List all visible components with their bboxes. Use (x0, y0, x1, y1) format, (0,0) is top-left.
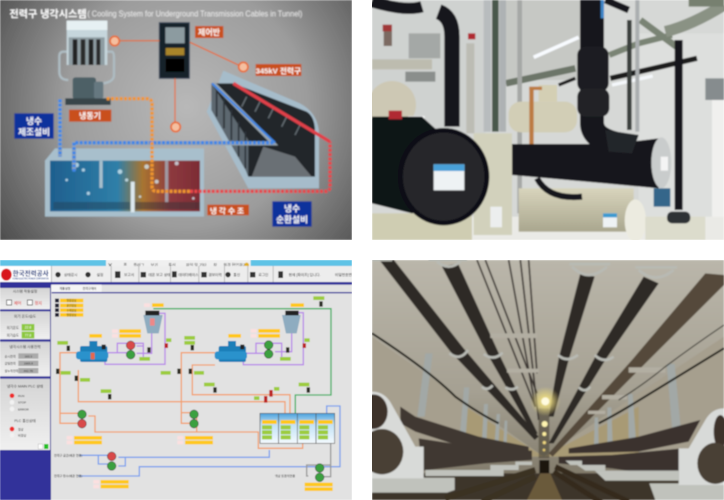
left valves and piping (368, 25, 475, 133)
legend (55, 299, 83, 317)
label: control panel (195, 26, 223, 38)
pipe endpoint labels: 맥상 트렌치연결 (275, 473, 295, 478)
legend: 수위정보 (67, 308, 77, 312)
sidebar: power use: 월누적전력 (5, 368, 19, 373)
cooling towers (143, 311, 301, 333)
title bar: 보기 (151, 262, 158, 268)
sidebar: system operation: 정지 (35, 300, 42, 306)
sidebar: PLC status: PLC 통신상태 (14, 418, 36, 423)
toolbar: 보고서 (124, 272, 134, 277)
tunnel lights (530, 387, 561, 451)
control panel (159, 23, 189, 78)
toolbar: 데몬 보고 상태 (148, 272, 171, 277)
icon: condenser unit (59, 21, 114, 83)
piping network (60, 309, 340, 477)
pink indicator tags (67, 303, 257, 488)
label: chilled water production equipment: 제조설비 (18, 126, 50, 137)
pipe endpoint labels: 전력구 공급(배관 연결) (54, 452, 82, 457)
toolbar: 로그인 (258, 272, 268, 277)
toolbar: 비밀번호변경 (335, 272, 355, 277)
green sensor readouts (57, 296, 324, 400)
label: chilled water circulation equipment: 냉수 (284, 202, 300, 213)
heading: cooling system title: ( Cooling System for Underground Transmission Cables in Tunnel) (87, 10, 303, 19)
panel: monitoring software screen (0, 260, 355, 500)
toolbar: 설정 (97, 272, 103, 277)
sidebar: outdoor temperature and humidity (0, 311, 50, 339)
piping: chilled supply, warm and return water (60, 83, 330, 191)
corrugated cables left (400, 407, 535, 500)
label: chiller (69, 110, 111, 122)
cooling water tank (45, 148, 204, 217)
side power cables (372, 325, 724, 423)
sidebar: PLC status: 정상 (18, 426, 24, 431)
sidebar: power use: 순시전력 (5, 353, 16, 358)
sidebar: power use: 163.3 (25, 354, 32, 358)
label: chiller: 냉동기 (79, 111, 101, 121)
corrugated cables right (554, 420, 700, 500)
tunnel (207, 71, 319, 188)
sidebar: power use: 금일전력 (5, 361, 16, 366)
panel: cooling system diagram (0, 0, 352, 240)
pumps (78, 341, 324, 482)
overhead pipes (379, 260, 724, 458)
sidebar: PLC status: RUN (18, 394, 24, 398)
sidebar: outdoor temperature and humidity: 외기온도 (7, 325, 19, 330)
water tanks (260, 413, 335, 443)
label: control panel: 제어반 (198, 27, 221, 37)
sensors (56, 301, 323, 403)
heading: cooling system title: 전력구 냉각시스템 (9, 7, 87, 20)
yellow status labels (74, 303, 333, 491)
control connection lines and nodes (110, 36, 248, 132)
ceiling cross beams (490, 333, 665, 414)
cable racks left (372, 462, 532, 493)
toolbar: 통신 (233, 272, 240, 277)
sidebar: PLC status: 냉각수 MAIN PLC 상태 (7, 383, 43, 388)
black evaporator shell and vertical pipe (512, 0, 671, 188)
wall brackets (417, 353, 681, 445)
dark upper pipes (372, 0, 679, 210)
panel: cable tunnel photo (360, 260, 724, 500)
KEPCO logo: KOREA ELECTRIC POWER CORPORATION (13, 277, 49, 280)
sidebar: power use: 442.7B (24, 369, 33, 373)
silver ladders (484, 0, 639, 213)
label: chilled water production equipment (14, 113, 54, 139)
pipe endpoint labels (54, 452, 295, 478)
content tabs: 계통설명 (59, 286, 71, 291)
toolbar: 경보이력 (208, 272, 222, 277)
sidebar: power use: 냉각시스템 사용전력 (9, 344, 41, 349)
sidebar background (0, 282, 51, 500)
KEPCO logo (0, 266, 51, 282)
title bar (0, 260, 352, 267)
legend: 알람정보 (67, 313, 77, 317)
lower beige shell (519, 178, 705, 242)
cable racks right (565, 461, 724, 500)
tunnel floor (527, 473, 562, 500)
legend: 운전정보 (67, 304, 77, 308)
legend: 알람정보 (67, 299, 77, 303)
sidebar: outdoor temperature and humidity: 외기 온도/습도 (14, 313, 37, 318)
control box (372, 133, 512, 240)
panel: chiller plant photo (368, 0, 724, 242)
sidebar: PLC status: STOP (18, 401, 26, 405)
sidebar: outdoor temperature and humidity: 22.8 (25, 326, 31, 330)
toolbar: 데이터베이스 (178, 272, 199, 277)
title bar: 원격 협업하기 (223, 262, 247, 268)
heading: cooling system title (9, 7, 303, 20)
cable trays (506, 0, 724, 85)
sidebar: PLC status: 비정상 (18, 433, 26, 438)
beige compressor (508, 84, 578, 146)
label: 345kV tunnel: 345kV 전력구 (256, 65, 301, 75)
large cable clamp left (360, 392, 424, 478)
vanishing point (539, 460, 549, 473)
title bar: 창 (213, 262, 217, 268)
sidebar: outdoor temperature and humidity: 77.8 (25, 333, 31, 337)
title bar: 파일 및 기타 (186, 262, 207, 268)
title bar: ✕ (107, 262, 113, 269)
sidebar: system operation (0, 288, 50, 309)
sidebar: power use (0, 342, 50, 376)
title bar: 통신 (168, 262, 176, 268)
sidebar: system operation: 제어 (14, 300, 22, 306)
sidebar: power use: 1965.8 (24, 362, 33, 366)
black condenser end cap with label (372, 111, 489, 225)
chillers (76, 341, 247, 362)
content tabs: 전력구제어 (83, 286, 97, 291)
pipe endpoint labels: 전력구 환수(배관 연결) (54, 473, 82, 478)
background ceiling and walls (428, 0, 724, 240)
toolbar: 상태감시 (64, 272, 77, 277)
title bar: 플러그 (133, 262, 145, 268)
label: chilled water circulation equipment: 순환설비 (276, 214, 308, 225)
label: chilled water production equipment: 냉수 (26, 115, 42, 126)
toolbar: 현재 [파이프] 입니다. (289, 272, 321, 277)
label: cooling water tank: 냉각수조 (210, 205, 246, 215)
tunnel walls (372, 337, 724, 500)
pipe clamps (372, 260, 677, 390)
KEPCO logo: 한국전력공사 (13, 268, 49, 277)
title bar: 홈 (123, 262, 127, 268)
large cable clamp right (679, 408, 724, 485)
content tabs (52, 285, 352, 293)
sidebar: outdoor temperature and humidity: 외기습도 (7, 332, 19, 337)
toolbar (0, 266, 355, 285)
sidebar: PLC status (0, 379, 50, 450)
sidebar: system operation: 시스템 작동설정 (13, 289, 37, 294)
icon: chiller compressor (65, 77, 111, 105)
label: chilled water circulation equipment (272, 201, 312, 227)
sidebar: PLC status: ERROR (18, 407, 30, 411)
